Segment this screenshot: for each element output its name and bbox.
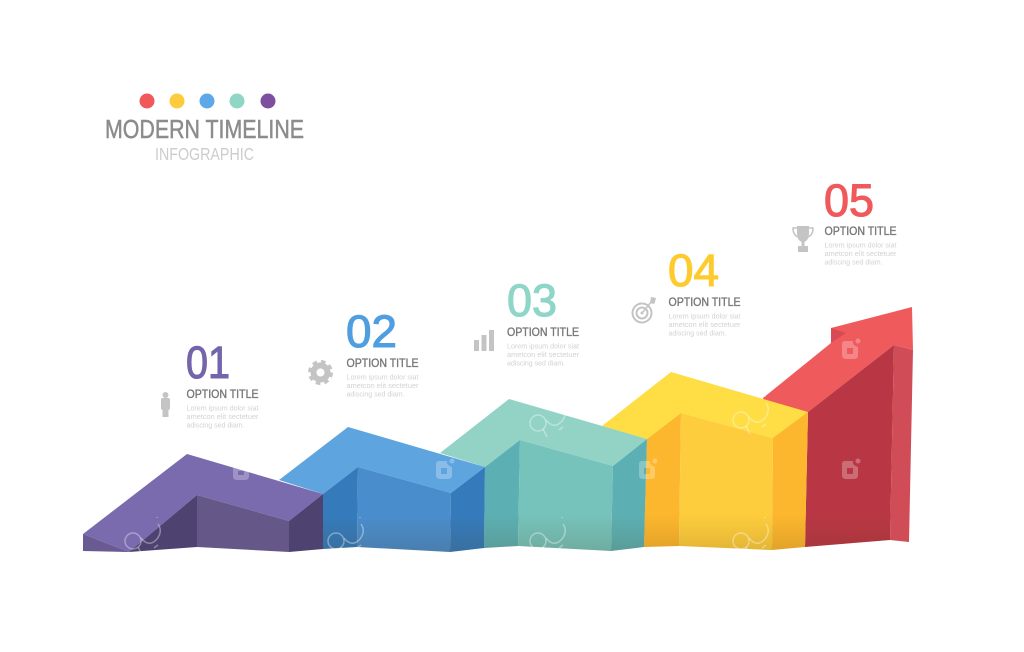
description 04: Lorem ipsum dolor siat [668,312,741,320]
description 05: Lorem ipsum dolor siat [824,240,897,250]
description 03: adiscing sed diam. [507,358,565,368]
icon: target [632,297,656,322]
description 04: adiscing sed diam. [668,328,726,338]
option title 05: OPTION TITLE [824,224,897,238]
description 01 [186,404,259,430]
colour dots [140,94,276,108]
step 01 text [186,337,259,430]
subtitle: INFOGRAPHIC [155,144,254,164]
option title 03: OPTION TITLE [507,325,579,339]
number 05: 05 [824,175,874,226]
icon: trophy [793,226,813,252]
header: dots and title [105,94,304,164]
panel: purple step 01 [83,454,323,552]
description 03: Lorem ipsum dolor siat [507,342,580,350]
step 03 text [507,275,580,368]
number 02: 02 [346,306,397,357]
panel: teal step 03 [440,399,647,551]
title: MODERN TIMELINE [105,114,304,144]
description 02: adiscing sed diam. [346,390,404,398]
number 01: 01 [186,337,230,388]
option title 04: OPTION TITLE [668,295,741,309]
description 01: Lorem ipsum dolor siat [186,404,259,412]
description 03: ametcon elit sectetuer [507,350,579,359]
icon: gear [310,362,331,383]
watermarks [125,338,860,555]
description 02: Lorem ipsum dolor siat [346,372,419,382]
description 05: ametcon elit sectetuer [824,249,897,258]
description 04 [668,312,741,338]
description 04: ametcon elit sectetuer [668,320,741,329]
icon: bar chart [474,330,494,351]
description 05 [824,240,897,266]
description 03 [507,342,580,368]
description 01: ametcon elit sectetuer [186,412,259,421]
step 02 text [346,306,419,398]
panel: yellow step 04 [602,372,808,550]
panel: red arrow step 05 [763,307,913,547]
number 04: 04 [668,245,719,296]
option title 01: OPTION TITLE [186,387,259,401]
option title 02: OPTION TITLE [346,356,419,370]
number 03: 03 [507,275,557,326]
step 04 text [668,245,741,338]
description 02: ametcon elit sectetuer [346,381,419,390]
icon: person [161,392,170,417]
description 05: adiscing sed diam. [824,258,882,266]
description 01: adiscing sed diam. [186,420,244,430]
description 02 [346,372,419,398]
panel: blue step 02 [279,427,485,552]
step 05 text [824,175,897,266]
